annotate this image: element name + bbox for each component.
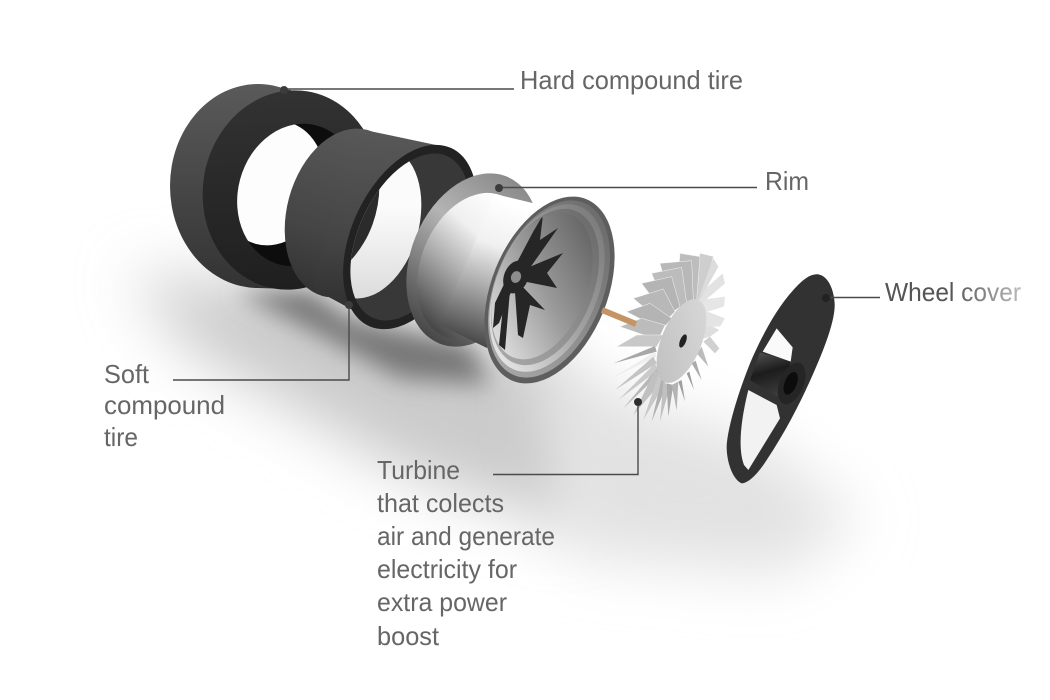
tread xyxy=(267,115,436,329)
turbine hole xyxy=(678,333,688,349)
callout: soft compound tire xyxy=(104,301,353,452)
soft compound tire xyxy=(284,128,474,330)
callout: turbine xyxy=(377,398,642,651)
label: boost xyxy=(377,621,440,651)
label: Hard compound tire xyxy=(520,65,743,95)
copper shaft xyxy=(602,310,636,324)
tire tread xyxy=(170,84,346,289)
label: tire xyxy=(104,422,138,452)
tire opening xyxy=(237,124,318,246)
cover plate xyxy=(727,274,835,483)
rim interior xyxy=(471,198,613,374)
turbine blades xyxy=(612,253,725,422)
cover hub xyxy=(750,353,791,398)
callout: rim xyxy=(495,166,809,196)
barrel xyxy=(396,176,550,356)
callout: hard compound tire xyxy=(280,65,743,95)
label: electricity for xyxy=(377,554,517,584)
leader line xyxy=(493,402,638,474)
cover upper opening xyxy=(763,328,793,362)
turbine xyxy=(602,253,725,422)
dot xyxy=(634,398,642,406)
rim xyxy=(406,173,615,384)
label: air and generate xyxy=(377,521,555,551)
leader line xyxy=(284,88,514,90)
inner surface xyxy=(326,135,494,339)
rim hub hole xyxy=(509,270,523,284)
label xyxy=(377,455,555,651)
label: Rim xyxy=(765,166,809,196)
floor shadows xyxy=(130,275,860,575)
leader line xyxy=(173,305,349,380)
wheel cover xyxy=(727,274,835,483)
tire sidewall xyxy=(187,76,395,304)
upper left blades xyxy=(617,253,700,347)
lower spikes xyxy=(612,346,708,422)
label: that colects xyxy=(377,488,504,518)
leader line xyxy=(826,296,880,298)
see-through opening xyxy=(350,161,422,298)
right blades xyxy=(693,253,725,353)
label: extra power xyxy=(377,587,507,617)
leader line xyxy=(499,186,757,188)
dot xyxy=(280,86,288,94)
spokes xyxy=(493,215,563,350)
label: Soft xyxy=(104,359,150,389)
label: compound xyxy=(104,390,225,420)
rear flange xyxy=(382,153,564,367)
exploded wheel infographic xyxy=(104,70,1021,646)
dot xyxy=(345,301,353,309)
label: Wheel cover xyxy=(885,277,1021,307)
lip rings xyxy=(464,183,634,395)
tire inner wall xyxy=(221,110,375,280)
label: Turbine xyxy=(377,455,460,485)
callout: wheel cover xyxy=(822,277,1021,307)
hard tire edge through opening xyxy=(351,190,380,260)
dot xyxy=(822,294,830,302)
turbine disc xyxy=(646,292,717,390)
dot xyxy=(495,184,503,192)
label xyxy=(104,359,225,452)
hard compound tire xyxy=(170,84,364,290)
front band xyxy=(316,124,504,350)
front lip xyxy=(459,177,640,403)
cover lower opening xyxy=(741,390,780,470)
